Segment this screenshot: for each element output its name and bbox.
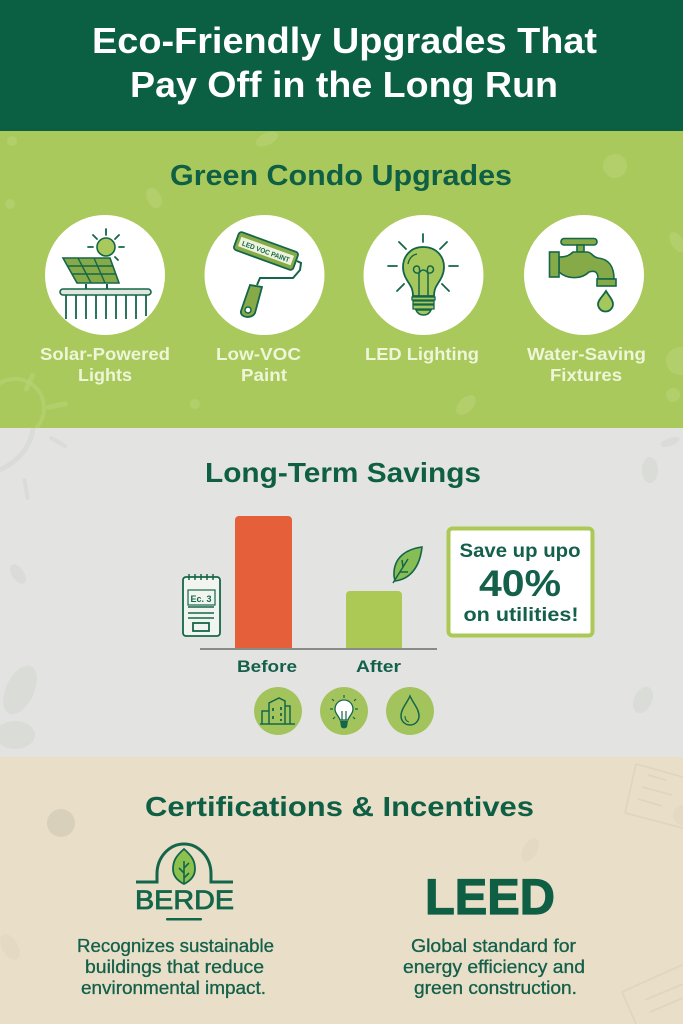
- icon: leaf: [393, 547, 422, 583]
- labels: upgrade names: Water-Saving: [527, 344, 646, 364]
- heading: Long-Term Savings: Long-Term Savings: [205, 457, 481, 488]
- panel: certifications and incentives: [0, 757, 683, 1024]
- labels: upgrade names: Lights: [78, 365, 132, 385]
- heading: Certifications & Incentives: Certifications & Incentives: [145, 791, 534, 822]
- panel: green condo upgrades: [0, 128, 683, 428]
- bar chart: before and after: Before: [237, 657, 297, 676]
- title: Pay Off in the Long Run: [130, 64, 558, 105]
- heading: Green Condo Upgrades: Green Condo Upgrades: [170, 160, 512, 192]
- icon: low-VOC paint roller: [204, 215, 324, 335]
- callout: save up to 40%: [448, 528, 592, 636]
- text: LEED description: green construction.: [414, 978, 577, 998]
- text: BERDE description: buildings that reduce: [85, 957, 264, 977]
- icon: utility bill: Ec. 3: [190, 594, 212, 604]
- labels: upgrade names: Paint: [241, 365, 287, 385]
- bar chart: before and after: [200, 516, 437, 676]
- labels: upgrade names: Solar-Powered: [40, 344, 170, 364]
- title: [92, 20, 597, 105]
- icon: small bulb: [320, 687, 368, 735]
- logo: BERDE: [135, 844, 234, 920]
- labels: upgrade names: LED Lighting: [365, 344, 479, 364]
- text: BERDE description: [77, 936, 274, 998]
- logo: LEED: LEED: [425, 869, 555, 925]
- text: BERDE description: environmental impact.: [81, 978, 266, 998]
- callout: save up to 40%: Save up upo: [460, 540, 581, 562]
- title: Eco-Friendly Upgrades That: [92, 20, 597, 61]
- bar chart: before and after: After: [356, 657, 401, 676]
- labels: upgrade names: Low-VOC: [216, 344, 301, 364]
- icon: building: [254, 687, 302, 735]
- icon: water drop: [386, 687, 434, 735]
- labels: upgrade names: [40, 344, 646, 385]
- panel: header: [0, 0, 683, 131]
- labels: upgrade names: Fixtures: [550, 365, 622, 385]
- text: LEED description: Global standard for: [411, 936, 576, 956]
- callout: save up to 40%: on utilities!: [464, 604, 578, 626]
- text: BERDE description: Recognizes sustainable: [77, 936, 274, 956]
- icon: LED bulb: [364, 215, 484, 335]
- logo: BERDE: BERDE: [135, 885, 234, 915]
- text: LEED description: [403, 936, 585, 998]
- text: LEED description: energy efficiency and: [403, 957, 585, 977]
- icon: water-saving faucet: [524, 215, 644, 335]
- icon: utility bill: [183, 574, 220, 636]
- callout: save up to 40%: 40%: [479, 563, 561, 604]
- icon: low-VOC paint roller: LED VOC PAINT: [241, 241, 291, 264]
- icon: solar-powered lights: [45, 215, 165, 335]
- panel: long-term savings: [0, 428, 683, 757]
